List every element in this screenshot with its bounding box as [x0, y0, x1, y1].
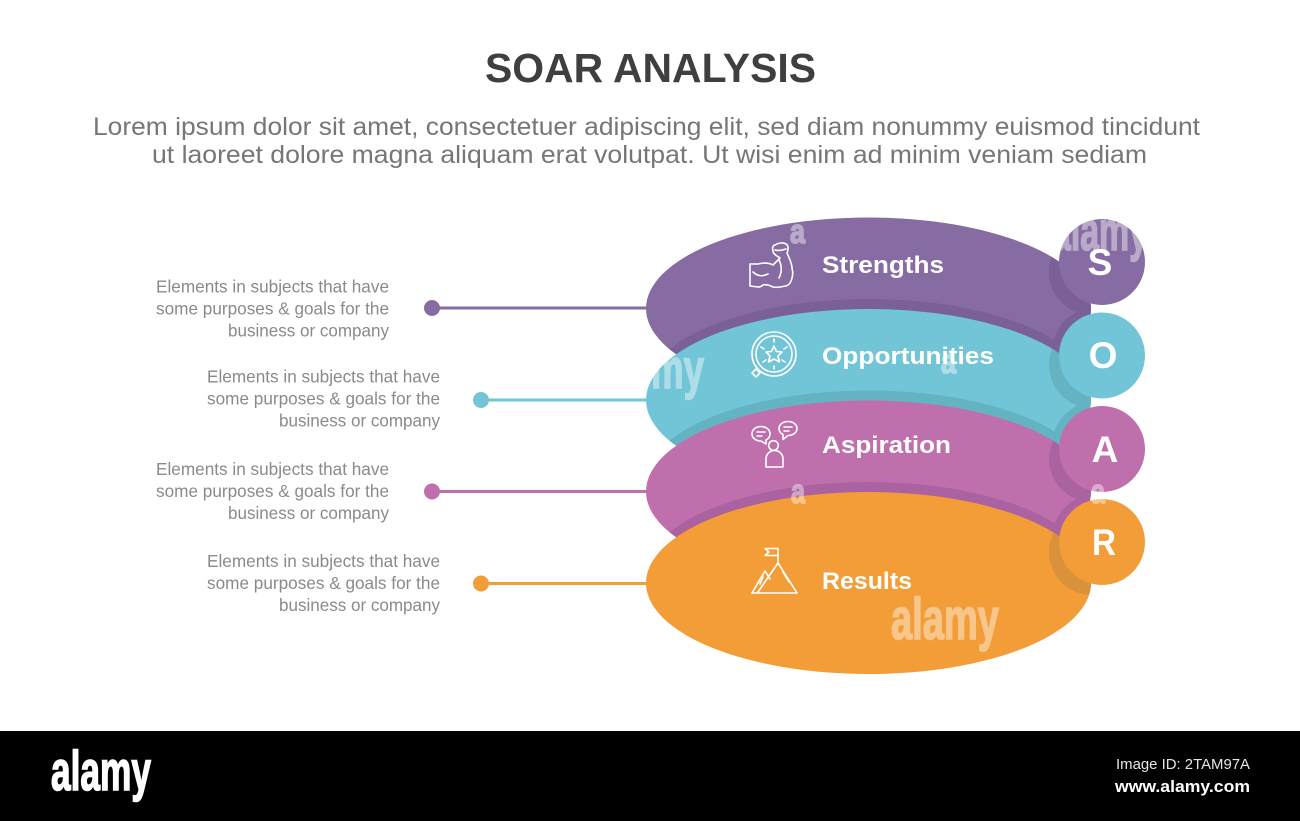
icon: flexed arm [750, 243, 793, 287]
badge: O: O [1089, 335, 1117, 376]
description: results: Elements in subjects that have [207, 551, 440, 571]
label: Opportunities: Opportunities [822, 343, 994, 370]
description: aspiration: Elements in subjects that have [156, 459, 389, 479]
badge: S [1059, 219, 1145, 305]
description: strengths: some purposes & goals for the [156, 298, 389, 318]
connector: aspiration [424, 484, 648, 500]
description: strengths: business or company [228, 320, 389, 340]
panel: strengths oval [646, 218, 1091, 354]
panel: aspiration oval [646, 400, 1091, 538]
footer bar: www.alamy.com [1114, 777, 1250, 796]
icon: star badge [752, 332, 796, 377]
watermark fragments: my [651, 337, 704, 400]
badge: R [1059, 499, 1145, 585]
watermark fragments [653, 220, 1142, 504]
description: opportunities: business or company [279, 410, 440, 430]
label: Results: Results [822, 568, 912, 595]
title: SOAR ANALYSIS [485, 45, 816, 91]
subtitle text block: ut laoreet dolore magna aliquam erat volutpat. Ut wisi enim ad minim veniam sediam [152, 141, 1147, 169]
description: results [207, 551, 440, 615]
icon: mountain flag [752, 548, 797, 593]
badge: S: S [1088, 242, 1112, 283]
panel: results oval [646, 492, 1091, 674]
description: opportunities: some purposes & goals for the [207, 388, 440, 408]
description: aspiration [156, 459, 389, 523]
connector: opportunities [473, 392, 648, 408]
subtitle text block: Lorem ipsum dolor sit amet, consectetuer adipiscing elit, sed diam nonummy euismod tincidunt [93, 113, 1200, 141]
badge: O [1059, 312, 1145, 398]
description: strengths [156, 276, 389, 340]
watermark: alamy: alamy [891, 587, 999, 652]
description: strengths: Elements in subjects that have [156, 276, 389, 296]
label: Strengths: Strengths [822, 252, 944, 279]
badge: A: A [1092, 429, 1118, 470]
description: aspiration: some purposes & goals for the [156, 481, 389, 501]
description: opportunities [207, 366, 440, 430]
subtitle text block [93, 113, 1200, 169]
watermark fragments: a [941, 343, 957, 381]
description: results: business or company [279, 595, 440, 615]
badge: R: R [1092, 522, 1116, 563]
connector: strengths [424, 300, 648, 316]
badge: A [1059, 406, 1145, 492]
icon: people talking [752, 422, 797, 467]
watermark fragments: a [1091, 473, 1106, 511]
footer bar: Image ID: 2TAM97A [1116, 756, 1250, 773]
panel: opportunities oval [646, 309, 1091, 446]
watermark fragments: a [790, 213, 806, 251]
footer bar: alamy [51, 739, 151, 802]
connector: results [473, 576, 648, 592]
description: aspiration: business or company [228, 503, 389, 523]
description: results: some purposes & goals for the [207, 573, 440, 593]
watermark fragments: a [791, 473, 806, 511]
watermark fragments: alamy [1052, 199, 1148, 262]
label: Aspiration: Aspiration [822, 432, 951, 459]
description: opportunities: Elements in subjects that have [207, 366, 440, 386]
footer bar [0, 731, 1300, 821]
